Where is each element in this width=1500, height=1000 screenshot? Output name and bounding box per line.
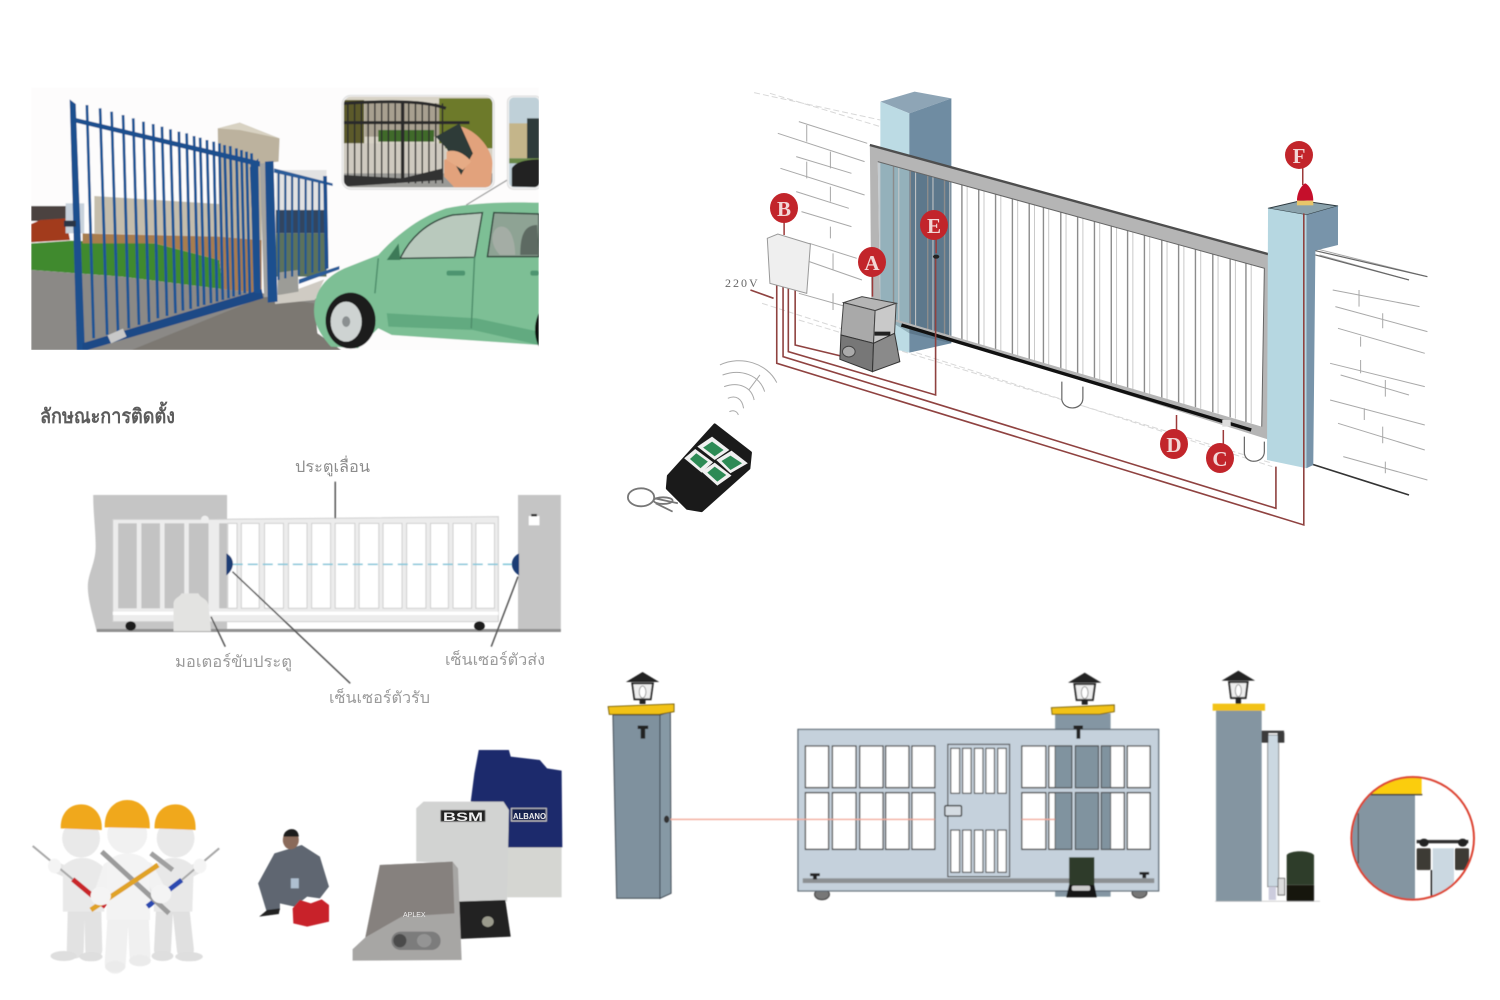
red tool box (293, 899, 329, 927)
blue ALBANO motor (471, 750, 562, 897)
label: ALBANO brand: ALBANO (513, 812, 546, 821)
radio waves (720, 361, 777, 415)
black rail (901, 325, 1251, 430)
brick wall and stone tower (83, 123, 280, 293)
gate panel (798, 729, 1159, 891)
gate frame (870, 145, 1278, 442)
gate wheels (815, 887, 1147, 900)
motor A (840, 297, 900, 372)
gate frame (113, 517, 498, 622)
end stops (810, 872, 1149, 879)
gate cells over wall (118, 523, 227, 608)
gate cells open (228, 523, 494, 608)
side pillar (1213, 704, 1265, 902)
inset: hand with remote (342, 95, 494, 189)
label: APLEX brand: APLEX (403, 912, 426, 919)
car body (314, 202, 539, 348)
illustration: front view sliding gate with pillars and lamps (608, 672, 1159, 900)
post lock (529, 514, 539, 525)
worker left (51, 804, 104, 961)
badge leader lines (784, 167, 1303, 455)
silver BSM motor (416, 802, 511, 939)
gate frame (64, 99, 263, 350)
wheels (125, 621, 485, 631)
technician crouching (258, 829, 329, 917)
ground line right (1309, 463, 1409, 495)
back pillar (1051, 705, 1114, 897)
sensor dot E (933, 255, 939, 259)
gate motor (1066, 857, 1097, 897)
badge A: A (864, 251, 880, 275)
left wall and right post (88, 495, 561, 632)
ground line (97, 629, 561, 632)
badge C (1206, 443, 1234, 473)
control box B (767, 234, 810, 293)
side lamp (1222, 671, 1255, 704)
small carriage C (1222, 420, 1231, 427)
lamp right (1068, 673, 1101, 705)
gate edge (1268, 735, 1279, 900)
badge F (1285, 141, 1313, 169)
motor (174, 593, 211, 631)
leader lines (211, 482, 518, 683)
badge A (858, 247, 886, 277)
rear pillar (878, 92, 951, 353)
label: BSM brand: BSM (443, 810, 483, 824)
background house (31, 203, 84, 242)
grey front motor (353, 862, 462, 961)
gate post and actuator (260, 161, 299, 303)
label: gate motor: มอเตอร์ขับประตู (175, 652, 292, 672)
warning beacon (1297, 183, 1313, 205)
right wall top (1315, 251, 1427, 280)
inset: gate and car mirror (507, 96, 541, 189)
label: receiver sensor: เซ็นเซอร์ตัวรับ (329, 687, 430, 707)
windows right (1022, 746, 1150, 849)
detail lens (1350, 777, 1474, 908)
car wheel (326, 293, 376, 349)
badge F: F (1293, 144, 1305, 168)
lamp left (626, 672, 659, 704)
gate hinge knob (201, 516, 209, 523)
diagram: sliding gate wiring with components A to F (628, 92, 1427, 525)
windows left (805, 746, 935, 849)
worker centre (102, 800, 160, 972)
pedestrian door (945, 744, 1010, 877)
label: transmitter sensor: เซ็นเซอร์ตัวส่ง (445, 649, 545, 669)
red beam (670, 818, 1055, 820)
remote antenna line (466, 179, 508, 205)
label: 220V supply: 220V (725, 276, 760, 290)
badge C: C (1212, 447, 1228, 471)
brick walls (778, 122, 1427, 480)
gate schematic artwork (88, 482, 561, 683)
side motor (1278, 851, 1314, 902)
badge B (770, 193, 798, 223)
label: sliding gate: ประตูเลื่อน (295, 455, 370, 477)
gate bars (87, 105, 255, 338)
sensor beam (233, 563, 512, 565)
right pillar (1267, 201, 1338, 468)
illustration: three workers and technician (33, 800, 329, 972)
remote control (667, 425, 750, 511)
ground (1215, 900, 1320, 903)
sensors (226, 553, 519, 575)
left pillar (608, 704, 674, 898)
badge D (1160, 429, 1188, 459)
pillar seen through windows (1055, 746, 1111, 849)
scene behind right gate leaf (276, 170, 327, 277)
badge E: E (927, 214, 941, 238)
photo: blue sliding gate with green car and remote insets (31, 87, 541, 350)
ground guide lines (754, 93, 1272, 467)
wires (750, 213, 1304, 525)
illustration: side view pillar with gate and motor (1213, 671, 1474, 908)
gate lower rail (113, 612, 498, 615)
grass and road (31, 241, 341, 350)
top bracket (1262, 731, 1284, 743)
worker right (152, 804, 203, 961)
wiring artwork (628, 92, 1427, 525)
badge B: B (777, 197, 791, 221)
T bracket (1074, 726, 1083, 739)
right gate leaf (274, 168, 339, 284)
gear rack (803, 878, 1154, 883)
badge D: D (1166, 433, 1182, 457)
product group: gate motors (353, 750, 562, 961)
tools (33, 846, 219, 913)
heading: installation characteristics: ลักษณะการติดตั้ง (40, 401, 175, 428)
badge E (920, 210, 948, 240)
gate guide wheels (1062, 382, 1264, 461)
gate bars (894, 166, 1246, 422)
diagram: sliding gate installation layout (88, 455, 561, 707)
key ring (628, 488, 678, 512)
gloves (48, 859, 206, 905)
